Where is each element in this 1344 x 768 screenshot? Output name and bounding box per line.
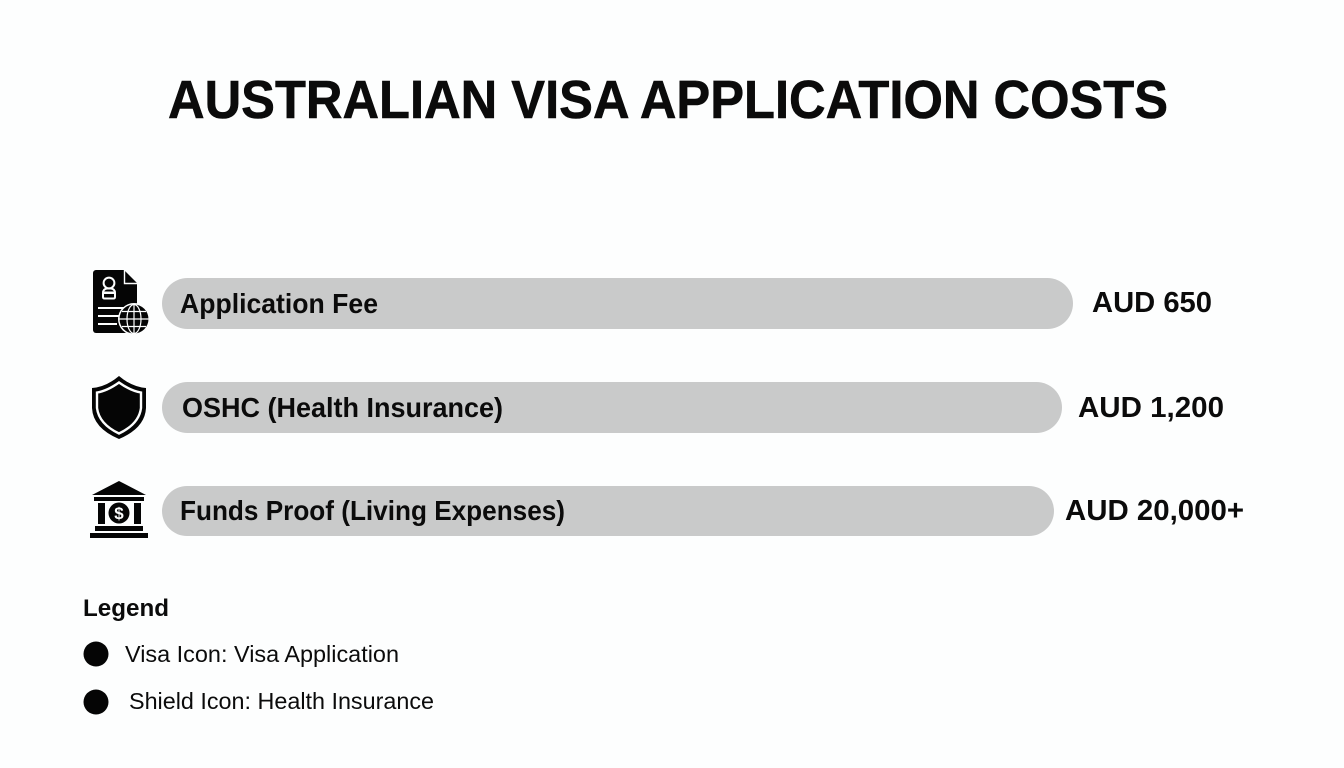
value: AUD 650: AUD 650 [1092, 287, 1212, 319]
legend item: shield icon: Shield Icon: Health Insurance [129, 688, 434, 714]
legend [83, 595, 434, 714]
bar: OSHC [162, 382, 1062, 433]
icon: visa document with globe [93, 270, 150, 335]
icon: shield [92, 376, 146, 439]
row: OSHC [92, 376, 1224, 439]
icon: bank: $ [114, 504, 124, 523]
label: funds proof: Funds Proof (Living Expenses) [180, 495, 565, 526]
label: application fee: Application Fee [180, 288, 378, 319]
title: AUSTRALIAN VISA APPLICATION COSTS [168, 70, 1168, 130]
row: funds proof [90, 481, 1244, 538]
legend heading: Legend [83, 595, 169, 622]
icon: bank [90, 481, 148, 538]
row: application fee [93, 270, 1212, 335]
bar: funds proof [162, 486, 1054, 536]
value: AUD 1,200: AUD 1,200 [1078, 392, 1224, 424]
value: AUD 20,000+: AUD 20,000+ [1065, 495, 1244, 527]
label: OSHC: OSHC (Health Insurance) [182, 392, 503, 423]
legend item: visa icon: Visa Icon: Visa Application [125, 641, 399, 667]
bar: application fee [162, 278, 1073, 329]
